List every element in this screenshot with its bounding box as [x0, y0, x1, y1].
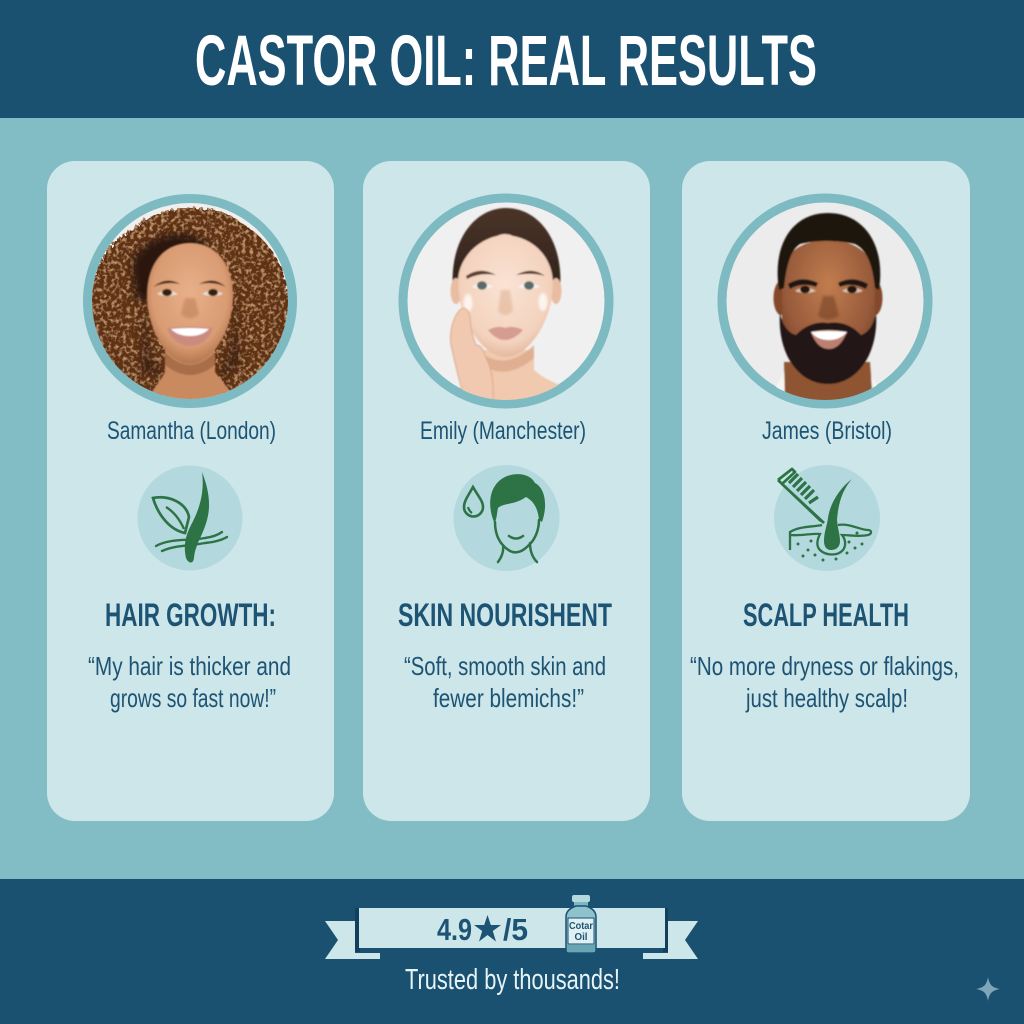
- name: James: James (Bristol): [762, 417, 892, 445]
- name: Samantha: Samantha (London): [107, 417, 276, 445]
- quote: James: “No more dryness or flakings,: [690, 651, 959, 681]
- tagline: Trusted by thousands!: [405, 964, 620, 996]
- quote: Samantha: grows so fast now!”: [110, 683, 276, 713]
- portrait: James: [722, 198, 928, 404]
- header banner: [0, 0, 1024, 118]
- heading: skin nourishment: SKIN NOURISHENT: [398, 597, 612, 633]
- icon: sparkle: [976, 977, 1000, 1001]
- icon: castor oil bottle: [566, 895, 596, 953]
- name: Emily: Emily (Manchester): [420, 417, 586, 445]
- icon: comb and hair follicle: [774, 465, 880, 571]
- heading: scalp health: SCALP HEALTH: [743, 597, 909, 633]
- quote: Emily: [404, 651, 606, 713]
- quote: James: just healthy scalp!: [745, 683, 908, 713]
- rating: 4.9: [437, 912, 472, 947]
- rating: [437, 912, 528, 947]
- quote: Samantha: [88, 651, 291, 713]
- panel: Samantha hair growth: [47, 161, 334, 821]
- icon: castor oil bottle: Cotar: [569, 921, 593, 932]
- quote: Samantha: “My hair is thicker and: [88, 651, 291, 681]
- quote: Emily: fewer blemichs!”: [433, 683, 584, 713]
- panel: Emily skin nourishment: [363, 161, 650, 821]
- portrait: Emily: [403, 198, 609, 405]
- icon: castor oil bottle: Oil: [574, 932, 588, 943]
- quote: James: [690, 651, 959, 713]
- rating: /5: [503, 912, 528, 947]
- panel: James scalp health: [682, 161, 970, 821]
- icon: face and droplet: [454, 465, 560, 571]
- quote: Emily: “Soft, smooth skin and: [404, 651, 606, 681]
- ribbon badge: [325, 895, 698, 959]
- heading: hair growth: HAIR GROWTH:: [105, 597, 276, 633]
- icon: leaf and hair: [138, 466, 242, 570]
- portrait: Samantha: [88, 198, 292, 404]
- footer banner: [0, 879, 1024, 1024]
